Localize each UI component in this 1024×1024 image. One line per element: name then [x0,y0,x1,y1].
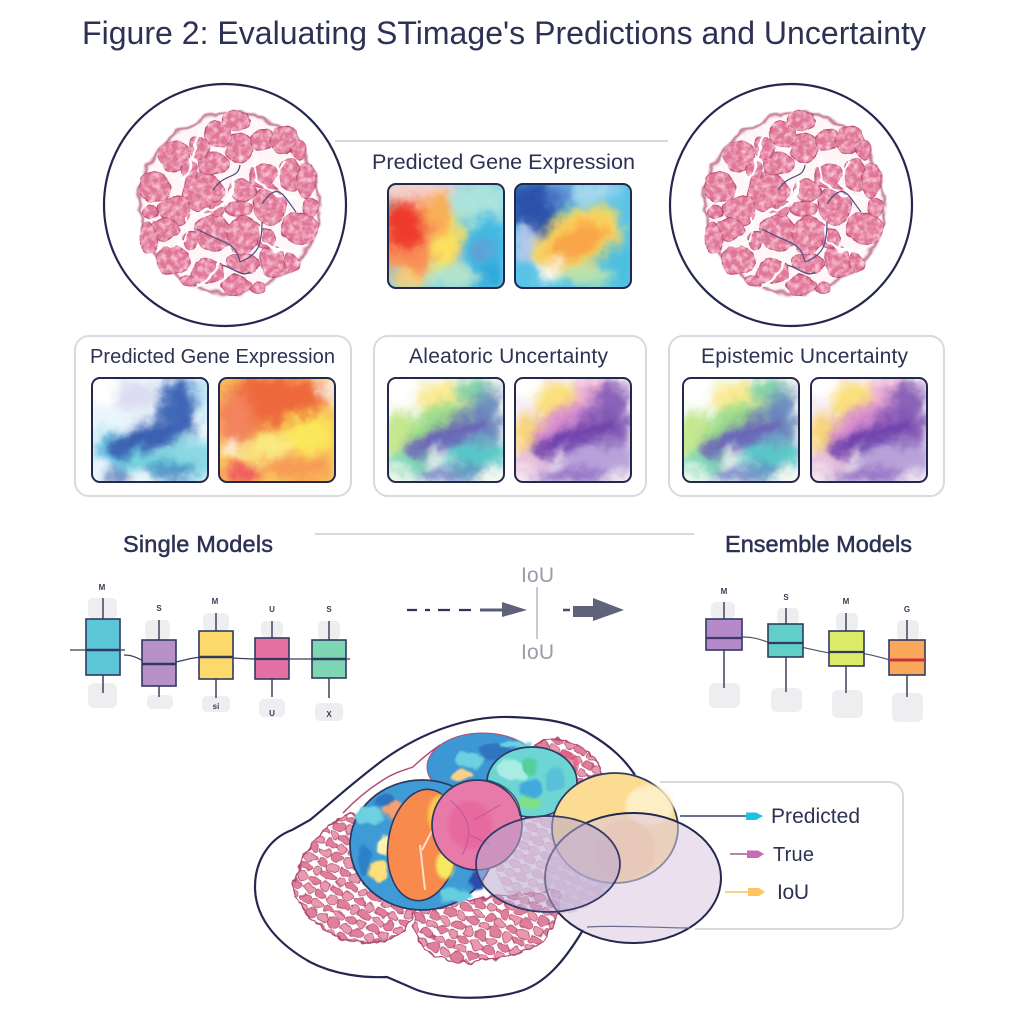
region: yellow [552,773,678,883]
region: teal [487,747,577,817]
pink and teal overlap [487,780,520,816]
legend box [660,782,903,929]
box 4: G [904,605,910,614]
section: predicted gene expression top [374,154,634,289]
IoU separator: IoU [521,564,554,587]
panel heading: Predicted Gene Expression [90,346,335,368]
divider middle [315,533,694,535]
box 2 [768,593,803,692]
legend: predicted [680,805,860,828]
IoU separator: IoU [521,641,554,664]
box 4: U [269,605,275,614]
box 3 [829,597,864,693]
box plots: single models [70,583,350,721]
IoU separator [521,564,554,664]
region: pink [432,780,522,870]
box 2: S [783,593,789,602]
lower value labels [213,702,332,719]
dashed arrow [407,602,527,617]
box plots: ensemble models [706,587,925,722]
brain outline [255,717,635,998]
lower value labels: X [326,710,332,719]
region: upper mosaic [427,733,539,801]
panel: epistemic uncertainty [669,336,944,496]
box 5 [312,605,346,698]
box 3 [199,597,233,698]
legend: predicted: Predicted [771,805,860,828]
box 1 [706,587,742,688]
brain with overlapping regions [255,717,721,998]
heatmap blue [91,377,209,483]
box 4 [255,605,289,697]
panel heading: Aleatoric Uncertainty [409,345,608,368]
box 4 [889,605,925,697]
legend: true [730,844,814,866]
box 3: M [212,597,219,606]
tissue circle right [670,84,912,326]
heatmap orange [218,377,336,483]
lower value labels: si [213,702,219,711]
heatmap purple [810,377,928,483]
box 1: M [99,583,106,592]
heading: single models: Single Models [123,531,273,557]
region: lower purple [545,813,721,943]
panel: aleatoric uncertainty [374,336,646,496]
heatmap green [387,377,505,483]
bold arrow [563,598,624,621]
lower value labels: U [269,709,275,718]
box 3: M [843,597,850,606]
panel heading: Epistemic Uncertainty [701,345,908,368]
box 1: M [721,587,728,596]
legend: IoU: IoU [777,881,809,904]
tissue: lower lobe [415,890,560,962]
box 2: S [156,604,162,613]
heatmap blue to orange [514,183,632,289]
box 5: S [326,605,332,614]
box 2 [142,604,176,697]
heading: Predicted Gene Expression [372,149,635,174]
inner rule [587,926,690,928]
tissue: upper arc [343,745,440,813]
title: Figure 2: Evaluating STimage's Predictions and Uncertainty [82,15,926,51]
box 1 [86,583,120,693]
divider top [335,140,668,142]
heading: ensemble models: Ensemble Models [725,531,912,557]
heatmap green [682,377,800,483]
legend: IoU [725,881,809,904]
tissue: left lobe [293,812,420,943]
heatmap purple [514,377,632,483]
legend: true: True [773,844,814,866]
tissue: upper right [535,739,605,800]
panel: predicted gene expression [75,336,351,496]
heatmap red to cyan [387,183,505,289]
region: lavender [476,816,620,912]
region: central tissue [495,805,615,915]
region: orange [381,785,465,905]
tissue circle left [104,84,346,326]
region: blue mosaic [350,780,494,910]
